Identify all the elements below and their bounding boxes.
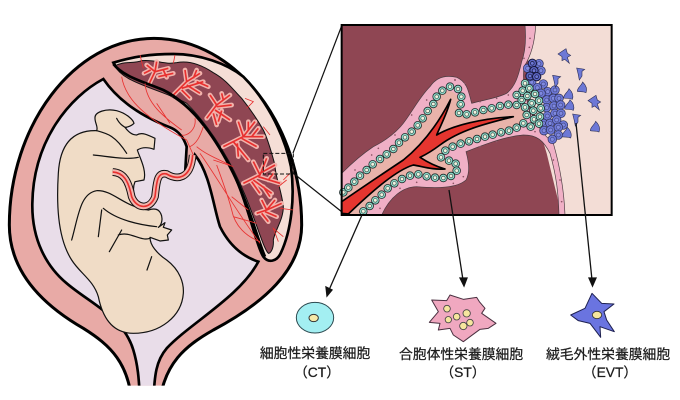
arrow: EVT [576,123,596,286]
icon: ST cell [429,295,496,342]
inset background: decidua [342,25,612,215]
zoom connector lines [293,25,342,212]
placental black chorionic line [113,64,265,257]
umbilical cord [113,155,193,206]
icon: EVT cell [571,293,614,337]
arrow: ST [449,190,467,286]
enlarged villus inset [340,25,612,215]
uterine wall [9,38,302,400]
chorionic and decidual blood vessels [122,55,293,243]
label: EVT: （EVT） [583,365,637,380]
label: ST: 合胞体性栄養膜細胞 [399,346,523,362]
arrow: CT [326,215,362,296]
fetal blood vessel [342,99,513,214]
syncytiotrophoblast layer [342,25,565,215]
label: ST: （ST） [440,365,486,380]
inset frame [342,25,612,215]
cytotrophoblast cells [340,79,544,215]
migrating extravillous trophoblasts [553,49,601,138]
uterus cross-section diagram [9,38,302,400]
placenta [115,60,283,253]
extravillous trophoblast cluster [523,59,568,144]
label: CT: （CT） [294,365,340,380]
villous stroma core [342,91,525,215]
label: CT: 細胞性栄養膜細胞 [260,345,370,361]
decidua [113,54,293,261]
fetus [58,110,183,333]
label: EVT: 絨毛外性栄養膜細胞 [546,346,670,362]
icon: CT cell [296,302,334,333]
placental villous trees [144,62,282,222]
syncytial nuclei dots [354,37,562,209]
dashed zoom region [263,153,293,174]
amniotic cavity [32,79,258,400]
maternal blood space [342,25,562,215]
